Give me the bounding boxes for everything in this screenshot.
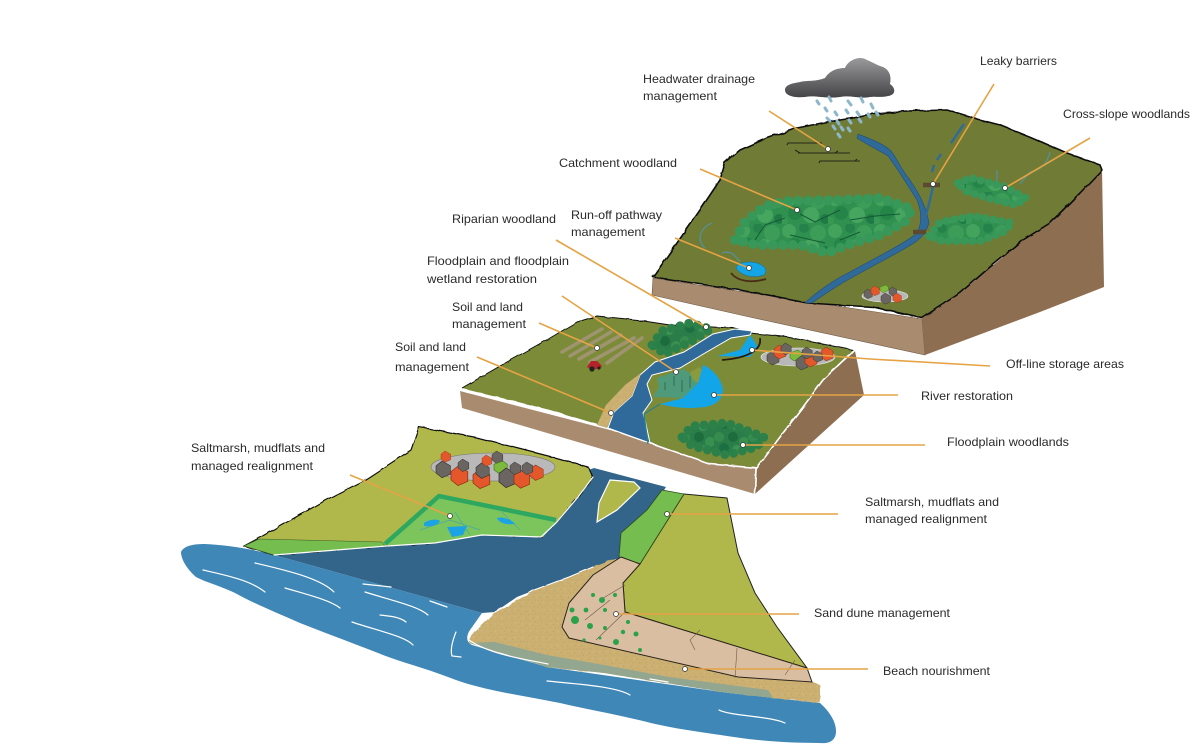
leaky dams	[913, 185, 940, 232]
label: headwater drainage management	[643, 72, 755, 103]
label: saltmarsh right: managed realignment	[865, 512, 988, 526]
riverbank strip	[597, 373, 641, 428]
floodplain white edge	[460, 350, 854, 494]
tractor	[587, 361, 602, 372]
cross-slope woodland	[958, 178, 1026, 205]
rain cloud	[785, 58, 894, 137]
off-line storage	[717, 335, 758, 357]
restored river lake	[660, 365, 723, 408]
village: floodplain	[761, 343, 835, 370]
realignment embankment	[385, 496, 556, 544]
cloud shape	[785, 58, 894, 98]
label: soil and land management, bank	[395, 340, 470, 374]
hill surface	[653, 110, 1102, 318]
block right face	[922, 168, 1104, 355]
storage bund	[722, 338, 760, 360]
white marsh shore	[274, 477, 593, 555]
label: saltmarsh left: managed realignment	[191, 459, 314, 473]
label: cross-slope woodlands: Cross-slope woodlands	[1063, 107, 1190, 121]
label: soil and land management, field	[452, 300, 527, 331]
wetland reeds	[665, 376, 690, 392]
block: headwater catchment	[652, 110, 1104, 355]
label: catchment woodland: Catchment woodland	[559, 156, 677, 170]
label: riparian woodland: Riparian woodland	[452, 212, 556, 226]
right marsh	[619, 490, 684, 564]
wetland	[653, 369, 697, 398]
right shore land	[623, 494, 807, 668]
wetland meadow	[690, 367, 705, 383]
label: floodplain and wetland restoration	[426, 254, 569, 286]
left shore land	[244, 427, 593, 555]
storage pond	[736, 262, 766, 277]
label: floodplain and wetland restoration: Floodplain and floodplain	[427, 254, 569, 268]
riparian woodland	[652, 323, 711, 354]
side channel	[644, 404, 660, 444]
label: saltmarsh left	[191, 441, 325, 473]
village: coastal	[431, 451, 555, 489]
label: soil and land management, field: Soil and land	[452, 300, 523, 314]
block: estuary and coast	[181, 427, 836, 743]
label: soil and land management, bank: Soil and land	[395, 340, 466, 354]
label: saltmarsh right	[865, 495, 999, 526]
dune contour lines	[585, 585, 795, 678]
label: beach nourishment: Beach nourishment	[883, 664, 991, 678]
catchment woodland	[735, 198, 912, 253]
tributary stream	[926, 124, 964, 215]
floodplain front face	[460, 391, 756, 494]
sand dunes	[562, 557, 812, 682]
label: run-off pathway management	[571, 208, 662, 239]
label: leaky barriers: Leaky barriers	[980, 54, 1057, 68]
valley woodland	[929, 216, 1012, 241]
marsh creeks	[420, 510, 520, 535]
main river	[805, 134, 929, 303]
headwater drains	[787, 143, 860, 163]
label: run-off pathway management: management	[571, 225, 646, 239]
sea waves	[203, 563, 785, 723]
wet sand	[469, 642, 773, 698]
block front face	[652, 278, 925, 355]
label: soil and land management, bank: management	[395, 360, 470, 374]
managed realignment marsh	[382, 495, 556, 546]
label: soil and land management, field: management	[452, 317, 527, 331]
floodplain river	[608, 329, 752, 443]
label: sand dune management: Sand dune management	[814, 606, 951, 620]
block: floodplain	[460, 316, 864, 494]
pond bund	[731, 273, 766, 281]
label: saltmarsh left: Saltmarsh, mudflats and	[191, 441, 325, 455]
run-off pathways	[700, 152, 1050, 262]
label: off-line storage areas: Off-line storage areas	[1006, 357, 1124, 371]
village: upland	[862, 285, 908, 304]
estuary water	[274, 468, 666, 613]
marker dots	[448, 146, 1008, 672]
leader lines	[350, 84, 1090, 669]
label: headwater drainage management: Headwater drainage	[643, 72, 755, 86]
label: run-off pathway management: Run-off pathway	[571, 208, 662, 222]
river island	[597, 480, 640, 522]
ploughed field stripes	[562, 329, 642, 363]
sea	[181, 544, 836, 743]
label: floodplain and wetland restoration: wetland restoration	[426, 272, 537, 286]
floodplain right face	[755, 351, 864, 494]
marsh ponds	[424, 517, 515, 537]
label: river restoration: River restoration	[921, 389, 1013, 403]
dune vegetation	[570, 593, 642, 652]
woodland canopy lines	[755, 210, 900, 243]
label: saltmarsh right: Saltmarsh, mudflats and	[865, 495, 999, 509]
label: headwater drainage management: management	[643, 89, 718, 103]
beach white shore	[495, 567, 593, 612]
coastal marsh strip	[244, 539, 385, 555]
floodplain surface	[462, 316, 853, 467]
rain drops	[817, 97, 878, 137]
label: floodplain woodlands: Floodplain woodlands	[947, 435, 1069, 449]
beach	[469, 557, 820, 703]
floodplain woodland	[682, 423, 764, 455]
floodplain back edge	[462, 316, 853, 388]
